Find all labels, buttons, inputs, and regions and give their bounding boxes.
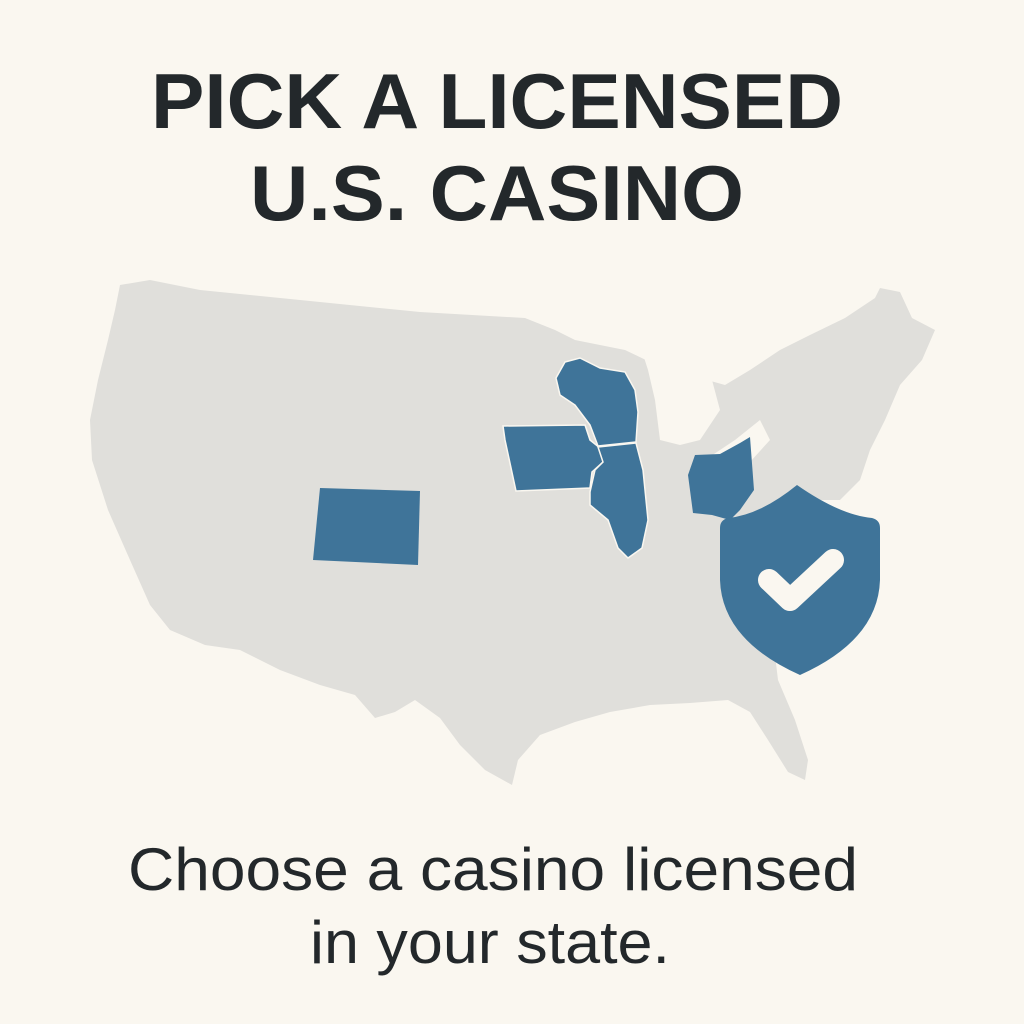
map: United States: [90, 280, 935, 785]
subtitle: in your state.: [310, 909, 670, 976]
state: Wisconsin: [556, 358, 638, 446]
state: Iowa: [503, 425, 603, 491]
title: PICK A LICENSED: [151, 57, 843, 145]
great lakes: [640, 345, 770, 468]
state: Illinois: [590, 443, 648, 558]
state: Colorado: [313, 488, 420, 565]
state: Ohio: [688, 437, 754, 520]
subtitle: [128, 836, 858, 976]
title: U.S. CASINO: [250, 149, 744, 237]
icon: shield with check: [720, 485, 880, 675]
title: [151, 57, 843, 237]
subtitle: Choose a casino licensed: [128, 836, 858, 903]
